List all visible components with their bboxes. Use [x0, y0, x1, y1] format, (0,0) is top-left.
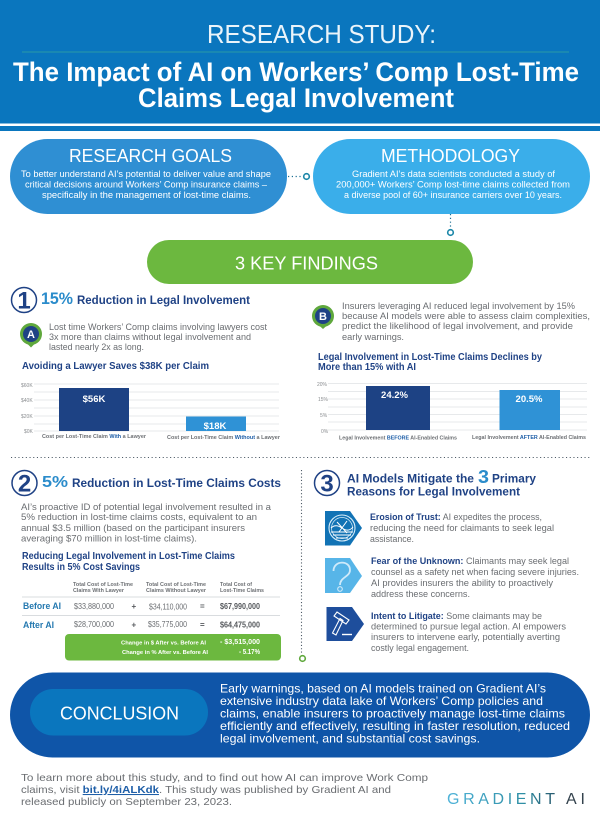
finding 1A text: 3x more than claims without legal involvement and	[49, 332, 251, 343]
finding 3 heading: 3	[478, 467, 489, 487]
text: erosion of trust: Erosion of Trust: AI expedites the process,	[370, 512, 542, 523]
bar chart: legal involvement rate: 15%	[318, 397, 329, 403]
conclusion panel: efficiently and effectively, resulting in faster resolution, reduced	[220, 719, 570, 733]
panel: research goals: specifically in the management of lost-time claims.	[42, 190, 251, 200]
panel: research goals: To better understand AI’s potential to deliver value and shape	[21, 169, 271, 179]
finding 1 heading	[12, 288, 250, 314]
finding 2 text	[21, 502, 272, 544]
key findings banner: 3 KEY FINDINGS	[235, 252, 378, 274]
bar chart: cost per claim: $56K	[83, 394, 105, 405]
cost table: $67,990,000	[220, 602, 260, 611]
cost table: +	[132, 620, 136, 630]
eyebrow heading: RESEARCH STUDY:	[207, 19, 436, 49]
text: erosion of trust: reducing the need for claimants to seek legal	[370, 523, 554, 534]
finding 2 heading: Reduction in Lost-Time Claims Costs	[72, 478, 281, 490]
panel: methodology: METHODOLOGY	[381, 146, 520, 166]
text: intent to litigate: costly legal engagement.	[371, 643, 469, 654]
key findings banner	[147, 240, 473, 284]
conclusion panel: extensive industry data lake of Workers’ Comp policies and	[220, 694, 543, 708]
title	[13, 57, 579, 113]
connector: goals to methodology	[288, 174, 309, 179]
panel: methodology: a diverse pool of 60+ insurance carriers over 10 years.	[344, 190, 562, 200]
bar chart: cost per claim: Cost per Lost-Time Claim With a Lawyer	[42, 434, 147, 440]
finding 1B text: because AI models were able to assess claim complexities,	[342, 311, 590, 322]
footer text	[21, 772, 428, 808]
finding 3 heading: Reasons for Legal Involvement	[347, 486, 520, 498]
bar chart: cost per claim	[21, 383, 281, 441]
finding 3 heading: AI Models Mitigate the	[347, 474, 474, 486]
finding 1B text: early warnings.	[342, 332, 404, 343]
cost table	[22, 582, 280, 630]
bar chart: legal involvement rate	[317, 382, 587, 442]
chart heading: legal involvement	[318, 352, 542, 373]
badge A	[20, 323, 42, 348]
change summary box: Change in $ After vs. Before AI	[121, 640, 206, 646]
chart heading: lawyer savings: Avoiding a Lawyer Saves $38K per Claim	[22, 361, 209, 372]
change summary box	[65, 634, 281, 660]
table heading	[22, 551, 235, 573]
panel: research goals: RESEARCH GOALS	[69, 146, 232, 166]
dotted dividers	[11, 458, 590, 661]
text: fear of the unknown: Fear of the Unknown: Claimants may seek legal	[371, 556, 569, 567]
text: fear of the unknown	[371, 556, 579, 600]
finding 2 heading: 2	[18, 470, 31, 498]
logo: gradient ai: AI	[566, 791, 585, 808]
finding 1 heading: 1	[17, 288, 31, 314]
footer text: claims, visit bit.ly/4iALKdk . This study was published by Gradient AI and	[21, 784, 391, 796]
text: erosion of trust: assistance.	[370, 534, 414, 545]
footer text: To learn more about this study, and to find out how AI can improve Work Comp	[21, 772, 428, 784]
bar chart: legal involvement rate: Legal Involvement BEFORE AI-Enabled Claims	[339, 436, 457, 442]
text: intent to litigate	[371, 611, 566, 654]
bar chart: cost per claim: $40K	[21, 398, 33, 404]
cost table: Before AI	[23, 601, 61, 611]
change summary box: - $3,515,000	[220, 637, 260, 646]
panel: research goals	[10, 139, 287, 214]
footer text: released publicly on September 23, 2023.	[21, 796, 232, 808]
title: The Impact of AI on Workers’ Comp Lost-Time	[13, 57, 579, 87]
bar chart: cost per claim: $18K	[204, 421, 226, 432]
bar chart: cost per claim: Cost per Lost-Time Claim Without a Lawyer	[167, 435, 281, 441]
conclusion panel: legal involvement, and substantial cost savings.	[220, 732, 480, 746]
bar chart: legal involvement rate: Legal Involvement AFTER AI-Enabled Claims	[472, 435, 586, 441]
bar chart: cost per claim: $0K	[24, 429, 34, 435]
bar chart: legal involvement rate: 20%	[317, 382, 328, 388]
cost table: +	[132, 602, 136, 611]
cost table: Claims With Lawyer	[73, 588, 125, 594]
cost table: $35,775,000	[148, 620, 187, 629]
finding 1A text: Lost time Workers’ Comp claims involving lawyers cost	[49, 322, 267, 333]
panel: methodology: Gradient AI’s data scientists conducted a study of	[352, 169, 556, 179]
panel: research goals: critical decisions around Workers’ Comp insurance claims –	[25, 180, 267, 190]
text: fear of the unknown: address these concerns.	[371, 589, 470, 600]
cost table: =	[200, 620, 205, 630]
conclusion panel: claims, enable insurers to proactively manage lost-time claims	[220, 706, 565, 720]
icon: fear of the unknown question mark	[325, 558, 362, 593]
header banner	[0, 0, 600, 131]
finding 3 heading: Primary	[492, 474, 537, 486]
chart heading: legal involvement: More than 15% with AI	[318, 362, 416, 373]
bar chart: legal involvement rate: 0%	[321, 429, 329, 435]
cost table: $34,110,000	[149, 602, 187, 612]
connector: methodology to findings	[448, 214, 453, 235]
cost table: Total Cost of Lost-Time	[73, 582, 133, 588]
logo: gradient ai: GRADIENT	[447, 791, 555, 808]
finding 3 heading	[314, 467, 537, 498]
icon: erosion of trust handshake	[325, 511, 362, 546]
bar chart: cost per claim: $20K	[21, 414, 33, 420]
title: Claims Legal Involvement	[138, 83, 454, 113]
cost table: Lost-Time Claims	[220, 588, 264, 594]
change summary box: - 5.17%	[239, 647, 260, 656]
conclusion panel	[10, 672, 590, 758]
finding 2 text: averaging $70 million in lost-time claims).	[21, 534, 197, 544]
cost table: $33,880,000	[74, 602, 114, 611]
cost table: Claims Without Lawyer	[146, 588, 207, 594]
bar chart: legal involvement rate: 20.5%	[516, 394, 543, 405]
finding 3 heading: 3	[320, 470, 334, 498]
conclusion panel: CONCLUSION	[60, 702, 179, 724]
text: intent to litigate: determined to pursue legal action. AI empowers	[371, 622, 566, 632]
chart heading: legal involvement: Legal Involvement in Lost-Time Claims Declines by	[318, 352, 542, 363]
finding 1B text: Insurers leveraging AI reduced legal involvement by 15%	[342, 301, 576, 312]
badge A: A	[27, 329, 35, 341]
conclusion panel: Early warnings, based on AI models trained on Gradient AI’s	[220, 682, 546, 696]
badge B: B	[319, 311, 327, 323]
finding 1A text	[49, 322, 267, 353]
bar chart: legal involvement rate: 5%	[320, 413, 328, 419]
text: fear of the unknown: AI provides insurers the ability to proactively	[371, 578, 553, 589]
cost table: After AI	[23, 620, 54, 630]
panel: methodology	[313, 139, 590, 214]
text: intent to litigate: Intent to Litigate: Some claimants may be	[371, 611, 542, 622]
finding 1 heading: Reduction in Legal Involvement	[77, 295, 250, 307]
badge B	[312, 305, 334, 329]
cost table: Total Cost of	[220, 582, 252, 588]
bar chart: legal involvement rate: 24.2%	[381, 390, 409, 401]
text: intent to litigate: insurers to intervene early, potentially averting	[371, 632, 560, 643]
finding 2 text: 5% reduction in lost-time claims costs, equivalent to an	[21, 512, 257, 523]
change summary box: Change in % After vs. Before AI	[122, 650, 208, 656]
finding 2 text: annual $3.5 million (based on the participant insurers	[21, 523, 245, 534]
finding 1A text: lasted nearly 2x as long.	[49, 342, 144, 353]
panel: methodology: 200,000+ Workers’ Comp lost-time claims collected from	[336, 180, 570, 190]
cost table: $28,700,000	[74, 620, 114, 629]
cost table: =	[200, 602, 205, 611]
finding 2 heading: 5%	[42, 474, 68, 491]
finding 2 heading	[12, 470, 281, 498]
text: fear of the unknown: counsel as a safety net when facing severe injuries.	[371, 567, 579, 578]
table heading: Reducing Legal Involvement in Lost-Time Claims	[22, 551, 235, 562]
finding 2 text: AI’s proactive ID of potential legal involvement resulted in a	[21, 502, 272, 513]
cost table: $64,475,000	[220, 620, 260, 630]
icon: intent to litigate gavel	[326, 607, 364, 641]
finding 1B text: predict the likelihood of legal involvement, and provide	[342, 321, 573, 332]
text: erosion of trust	[370, 512, 554, 545]
bar chart: cost per claim: $60K	[21, 383, 33, 389]
table heading: Results in 5% Cost Savings	[22, 562, 140, 573]
finding 1B text	[342, 301, 590, 343]
finding 1 heading: 15%	[41, 289, 73, 308]
cost table: Total Cost of Lost-Time	[146, 582, 206, 588]
